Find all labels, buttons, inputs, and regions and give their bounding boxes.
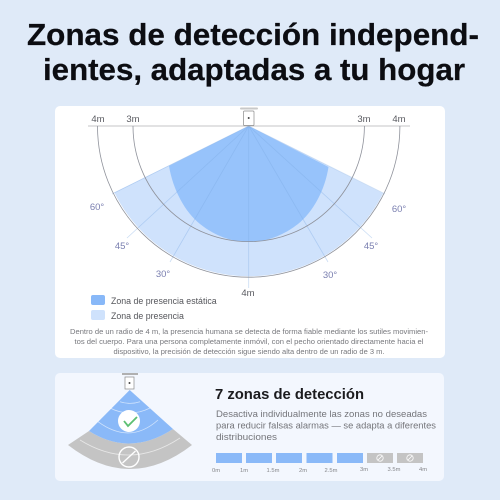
- title: ientes, adaptadas a tu hogar: [43, 53, 465, 87]
- title: Zonas de detección independ-: [27, 18, 479, 52]
- angle labels: 30°: [323, 270, 337, 281]
- zones description: Desactiva individualmente las zonas no deseadas: [216, 409, 428, 419]
- distance labels: 4m: [392, 114, 406, 125]
- zone bar: 2m: [299, 468, 307, 474]
- zones description: para reducir falsas alarmas — se adapta a diferentes: [216, 420, 437, 430]
- description text: Dentro de un radio de 4 m, la presencia humana se detecta de forma fiable mediante los sutiles movimien-: [70, 328, 429, 336]
- zone bar: [212, 453, 427, 474]
- legend: Zona de presencia estática: [111, 296, 217, 306]
- zone bar: 0m: [212, 468, 220, 474]
- icon: sensor: [240, 108, 258, 126]
- range arcs: [98, 126, 400, 277]
- icon: check: [118, 410, 140, 432]
- legend: [91, 295, 217, 321]
- zone bar: 2.5m: [325, 468, 338, 474]
- horizontal baseline: [88, 125, 410, 127]
- icon: prohibited: [119, 447, 139, 467]
- angle guide lines: [112, 126, 385, 288]
- zone bar: 4m: [419, 467, 427, 473]
- description text: [70, 328, 429, 356]
- title: [27, 18, 479, 87]
- angle labels: 60°: [392, 204, 406, 215]
- zones description: [216, 409, 437, 442]
- angle labels: 60°: [90, 202, 104, 213]
- zone bar: 1m: [240, 468, 248, 474]
- angle labels: 30°: [156, 269, 170, 280]
- zones heading: 7 zonas de detección: [215, 387, 364, 403]
- icon: zone fan: [68, 373, 192, 469]
- description text: tos del cuerpo. Para una persona completamente inmóvil, con el pecho orientado directamente hacia el: [74, 338, 424, 346]
- distance labels: 3m: [357, 114, 371, 125]
- presence zone sector: [114, 126, 383, 276]
- legend: Zona de presencia: [111, 311, 184, 321]
- panel: detection diagram: [55, 106, 445, 358]
- distance labels: 4m: [241, 288, 255, 299]
- angle labels: [90, 202, 406, 281]
- zone bar: 1.5m: [267, 468, 280, 474]
- zone bar: 3.5m: [388, 467, 401, 473]
- distance labels: 4m: [91, 114, 105, 125]
- distance labels: [91, 114, 406, 299]
- panel: 7 detection zones: [55, 373, 444, 481]
- zones description: distribuciones: [216, 432, 278, 442]
- description text: dispositivo, la precisión de detección sigue siendo alta dentro de un radio de 3 m.: [114, 348, 385, 356]
- angle labels: 45°: [115, 241, 129, 252]
- static presence zone: [169, 126, 328, 242]
- distance labels: 3m: [126, 114, 140, 125]
- angle labels: 45°: [364, 241, 378, 252]
- zone bar: 3m: [360, 467, 368, 473]
